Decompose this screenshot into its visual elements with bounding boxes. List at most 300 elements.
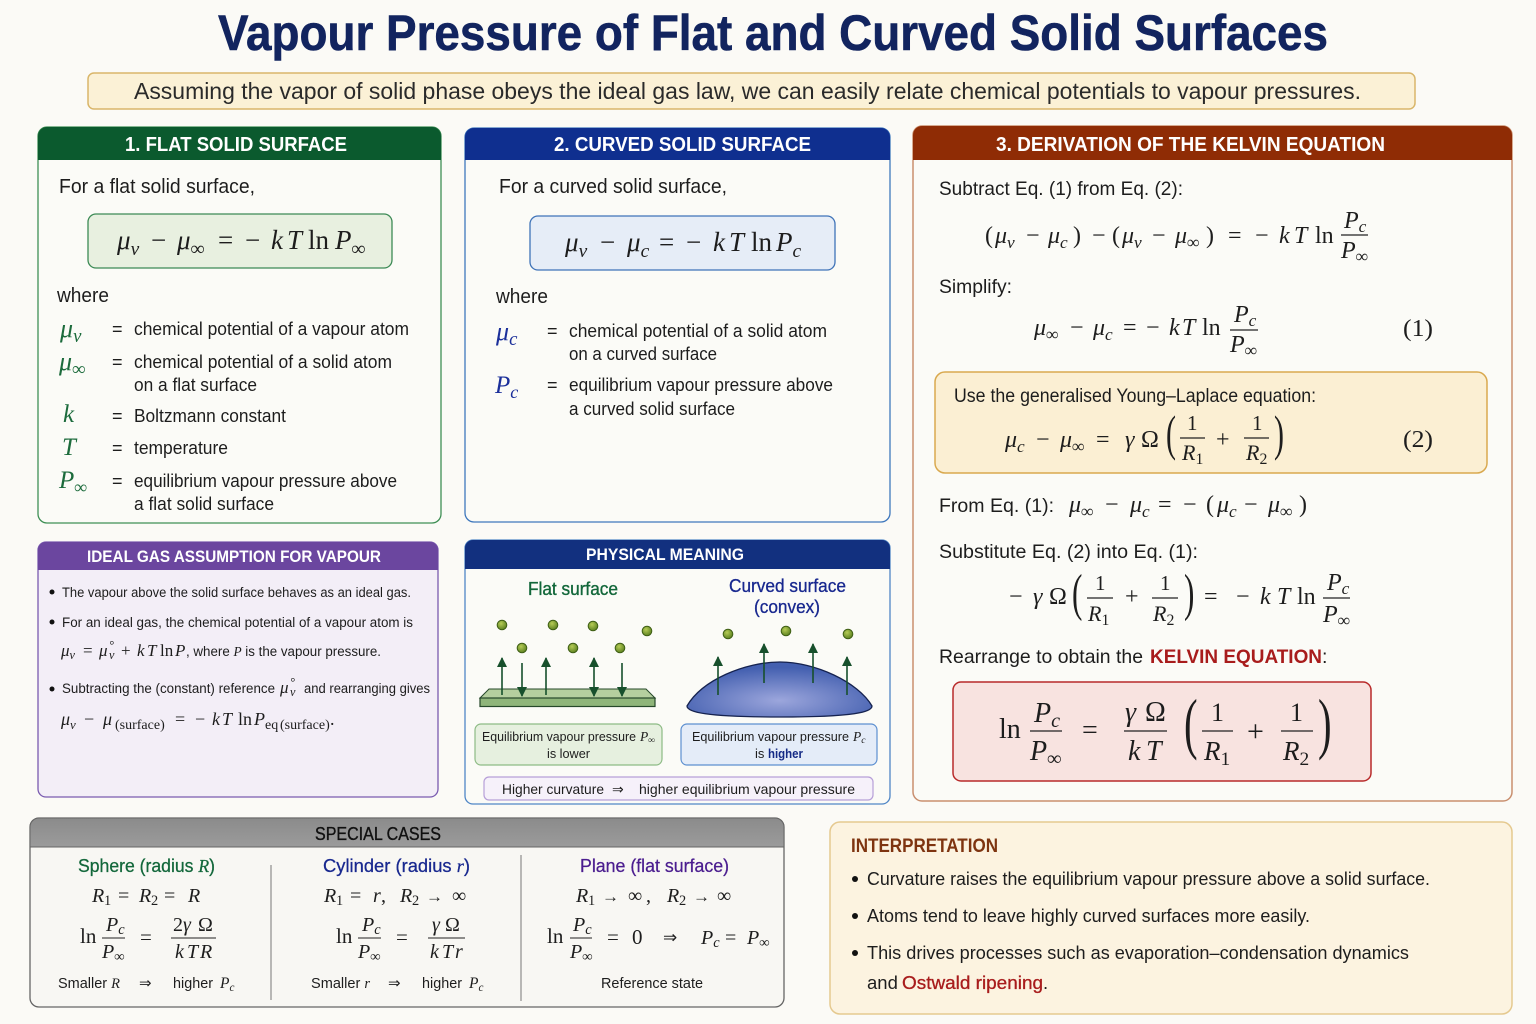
- case: sphere: P: [102, 941, 114, 963]
- definition: mu c: on a curved surface: [569, 344, 717, 364]
- case: sphere: k: [175, 941, 185, 963]
- step: rearrange to Kelvin equation: Rearrange to obtain the: [939, 646, 1143, 668]
- panel header: derivation: [913, 126, 1512, 160]
- equation: subtraction: −: [1026, 223, 1040, 249]
- step: from equation 1: c: [1142, 502, 1150, 521]
- result box: Kelvin equation: γ: [1125, 697, 1136, 728]
- equation: subtraction: −: [1092, 223, 1106, 249]
- callout: Young–Laplace equation: Use the generalised Young–Laplace equation:: [954, 386, 1316, 407]
- case: sphere: 2: [151, 893, 158, 909]
- case: plane: ln: [547, 924, 564, 948]
- case: plane: =: [607, 925, 619, 949]
- bullet: subtracting reference: °: [290, 675, 295, 689]
- note box: curvature conclusion: ⇒: [612, 781, 624, 797]
- subtitle banner: [88, 73, 1415, 109]
- equation: substitution: [1009, 565, 1350, 630]
- diagram: flat surface with atoms: [480, 620, 655, 706]
- equation: substitution: c: [1342, 579, 1350, 598]
- case: cylinder: T: [442, 941, 455, 963]
- case: plane: [547, 856, 769, 992]
- case: plane: 2: [679, 893, 686, 909]
- callout: Young–Laplace equation: (: [1166, 405, 1176, 462]
- step: from equation 1: −: [1244, 492, 1258, 518]
- case: cylinder: [311, 856, 483, 994]
- definition: mu infinity: [58, 347, 392, 395]
- callout: Young–Laplace equation: γ: [1125, 427, 1135, 453]
- definition: mu infinity: chemical potential of a solid atom: [134, 352, 392, 372]
- equation box: flat: T: [287, 225, 304, 255]
- case: cylinder: Smaller r: [311, 975, 370, 992]
- note box: curved higher pressure: c: [861, 735, 866, 746]
- label: curved surface: [729, 576, 846, 617]
- panel header: flat: [38, 127, 441, 160]
- definition: T: =: [112, 438, 123, 458]
- equation: subtraction: P: [1341, 238, 1356, 264]
- equation: subtraction: [985, 208, 1368, 266]
- case: sphere: c: [229, 982, 234, 994]
- definition: mu v: v: [73, 326, 82, 347]
- case: sphere: P: [220, 975, 229, 992]
- case: cylinder: →: [426, 887, 443, 906]
- equation 1: μ: [1033, 315, 1046, 341]
- equation: substitution: −: [1236, 584, 1250, 610]
- equation box: flat: P: [334, 225, 352, 255]
- label: curved surface: Curved surface: [729, 576, 846, 596]
- case: sphere: γ: [183, 914, 192, 936]
- callout: Young–Laplace equation: Ω: [1141, 427, 1159, 453]
- equation: subtraction: =: [1228, 223, 1242, 249]
- bullet: subtracting reference: k: [212, 709, 221, 729]
- definition: mu infinity: μ: [59, 347, 72, 376]
- equation: substitution: −: [1009, 584, 1023, 610]
- bullet: chemical potential: [50, 615, 413, 662]
- equation: substitution: ∞: [1338, 611, 1350, 630]
- case: cylinder: ∞: [370, 949, 380, 965]
- definition: P c: a curved solid surface: [569, 399, 735, 419]
- equation: substitution: γ: [1033, 584, 1043, 610]
- result box: Kelvin equation: +: [1247, 715, 1264, 748]
- case: sphere: R: [138, 885, 151, 907]
- result box: Kelvin equation: k: [1128, 736, 1140, 767]
- equation: substitution: (: [1072, 565, 1082, 622]
- step: from equation 1: μ: [1129, 492, 1142, 518]
- bullet: subtracting reference: T: [222, 709, 234, 729]
- equation: substitution: P: [1323, 602, 1338, 628]
- panel header: ideal gas: IDEAL GAS ASSUMPTION FOR VAPOUR: [87, 547, 381, 566]
- case: sphere: Smaller R: [58, 975, 120, 992]
- equation: substitution: =: [1204, 584, 1218, 610]
- equation box: flat: μ: [116, 225, 131, 255]
- case: plane: P: [570, 941, 582, 963]
- panel: interpretation: [830, 822, 1512, 1014]
- step text: simplify: Simplify:: [939, 276, 1012, 298]
- bullet: chemical potential: P: [174, 641, 185, 660]
- callout: Young–Laplace equation: 1: [1252, 411, 1262, 435]
- step: from equation 1: ∞: [1081, 502, 1093, 521]
- case: plane: ∞: [759, 935, 769, 951]
- panel header: derivation: 3. DERIVATION OF THE KELVIN EQUATION: [996, 134, 1385, 156]
- case: plane: P: [700, 927, 713, 949]
- case: plane: 0: [632, 925, 642, 949]
- definition: mu c: chemical potential of a solid atom: [569, 321, 827, 341]
- equation box: flat: [88, 214, 392, 268]
- result box: Kelvin equation: c: [1051, 710, 1060, 732]
- case: sphere: 1: [104, 893, 111, 909]
- equation box: curved: ln: [751, 227, 773, 257]
- bullet: subtracting reference: [50, 675, 430, 733]
- bullet: chemical potential: =: [83, 641, 93, 660]
- heading: interpretation: INTERPRETATION: [851, 836, 998, 857]
- step: from equation 1: −: [1105, 492, 1119, 518]
- equation box: flat: μ: [176, 225, 191, 255]
- equation 1: μ: [1092, 315, 1105, 341]
- case: sphere: higher: [173, 975, 213, 992]
- title: Vapour Pressure of Flat and Curved Solid Surfaces: [218, 5, 1328, 61]
- panel: physical meaning: [465, 540, 890, 804]
- equation: subtraction: ): [1206, 223, 1214, 249]
- note box: curvature conclusion: [484, 777, 873, 800]
- step: from equation 1: c: [1229, 502, 1237, 521]
- case: sphere: =: [164, 885, 175, 907]
- case: sphere: 2: [173, 914, 183, 936]
- case: plane: ∞: [628, 885, 642, 907]
- equation: substitution: R: [1088, 601, 1101, 626]
- step: from equation 1: [939, 492, 1307, 521]
- diagram: curved surface with atoms: [687, 626, 872, 717]
- equation: subtraction: P: [1344, 208, 1359, 234]
- equation box: flat: −: [151, 225, 166, 255]
- equation box: curved: −: [686, 227, 701, 257]
- case: sphere: c: [118, 922, 125, 938]
- case: plane: →: [693, 887, 710, 906]
- equation 1: c: [1105, 325, 1113, 344]
- bullet: chemical potential: T: [147, 641, 158, 660]
- bullet: subtracting reference: μ: [102, 709, 112, 729]
- result box: Kelvin equation: 1: [1290, 698, 1303, 727]
- callout: Young–Laplace equation: −: [1036, 427, 1050, 453]
- definition: P c: equilibrium vapour pressure above: [569, 375, 833, 395]
- bullet: chemical potential: °: [109, 638, 114, 652]
- step: from equation 1: μ: [1068, 492, 1081, 518]
- note box: curved higher pressure: is: [755, 746, 765, 761]
- equation: subtraction: ∞: [1356, 247, 1368, 266]
- definition: P infinity: equilibrium vapour pressure above: [134, 471, 397, 491]
- bullet: processes: and: [867, 972, 898, 993]
- equation: substitution: T: [1277, 584, 1292, 610]
- callout: Young–Laplace equation: c: [1017, 437, 1025, 456]
- definition: P infinity: ∞: [74, 477, 87, 497]
- panel header: physical meaning: [465, 540, 890, 569]
- equation: substitution: +: [1125, 584, 1139, 610]
- definition: mu v: μ: [60, 314, 73, 343]
- equation 1: ln: [1202, 315, 1221, 341]
- result box: Kelvin equation: P: [1030, 736, 1047, 767]
- case: cylinder: higher: [422, 975, 462, 992]
- case: plane: P: [573, 914, 585, 936]
- equation box: flat: ∞: [191, 239, 204, 260]
- panel header: ideal gas: [38, 542, 438, 570]
- bullet: chemical potential: μ: [60, 641, 70, 660]
- step: rearrange to Kelvin equation: [939, 646, 1327, 668]
- note box: curvature conclusion: Higher curvature: [502, 781, 604, 797]
- panel header: curved: 2. CURVED SOLID SURFACE: [554, 134, 811, 156]
- equation 1: =: [1123, 315, 1137, 341]
- equation: substitution: k: [1260, 584, 1271, 610]
- equation: substitution: 2: [1166, 612, 1174, 629]
- equation 1: [1033, 302, 1433, 360]
- bullet: subtracting reference: v: [290, 685, 296, 699]
- bullet: processes: [852, 942, 1409, 993]
- panel: derivation of the Kelvin equation: [913, 126, 1512, 801]
- case: sphere: ∞: [114, 949, 124, 965]
- definition: P c: [494, 372, 833, 419]
- case: sphere: T: [187, 941, 200, 963]
- case: plane: c: [713, 935, 720, 951]
- case: plane: ,: [646, 885, 651, 907]
- case: cylinder: k: [430, 941, 440, 963]
- definition: P c: P: [495, 372, 510, 399]
- bullet: subtracting reference: −: [84, 709, 94, 729]
- equation box: curved: c: [641, 241, 650, 262]
- label: flat surface: Flat surface: [528, 579, 618, 599]
- where label: flat: where: [56, 285, 109, 307]
- case: cylinder: P: [358, 941, 370, 963]
- equation 1: P: [1234, 302, 1249, 328]
- equation box: flat: v: [131, 239, 140, 260]
- case: cylinder: c: [374, 922, 381, 938]
- definition: mu v: chemical potential of a vapour atom: [134, 319, 409, 339]
- equation box: curved: T: [729, 227, 746, 257]
- case: sphere: Sphere (radius R): [78, 856, 215, 876]
- definition: P infinity: [58, 467, 397, 514]
- definition: mu infinity: =: [112, 352, 123, 372]
- panel header: special cases: SPECIAL CASES: [315, 824, 441, 844]
- note box: curved higher pressure: higher: [768, 746, 803, 761]
- note box: curvature conclusion: higher equilibrium vapour pressure: [639, 781, 855, 797]
- case: plane: P: [746, 927, 759, 949]
- intro text: flat: For a flat solid surface,: [59, 176, 255, 198]
- panel header: special cases: [30, 818, 784, 847]
- panel: curved solid surface: [465, 128, 890, 522]
- bullet: subtracting reference: eq: [265, 718, 278, 733]
- definition: k: =: [112, 406, 123, 426]
- equation box: curved: [530, 216, 835, 270]
- equation: subtraction: ln: [1315, 223, 1334, 249]
- bullet: chemical potential: v: [109, 648, 115, 662]
- bullet: chemical potential: v: [70, 648, 76, 662]
- bullet: subtracting reference: μ: [279, 678, 289, 697]
- result box: Kelvin equation: 2: [1300, 749, 1309, 770]
- equation 1: T: [1182, 315, 1197, 341]
- callout: Young–Laplace equation: 1: [1187, 411, 1198, 435]
- case: plane: R: [575, 885, 588, 907]
- bullet: subtracting reference: =: [175, 709, 185, 729]
- equation: subtraction: ): [1073, 223, 1081, 249]
- case: cylinder: γ: [432, 914, 441, 936]
- note box: flat lower pressure: [475, 724, 662, 765]
- equation box: curved: μ: [564, 227, 579, 257]
- definition: mu infinity: on a flat surface: [134, 375, 257, 395]
- case: plane: Reference state: [601, 975, 703, 992]
- definition: mu c: μ: [496, 317, 509, 346]
- case: cylinder: c: [478, 982, 483, 994]
- note box: curved higher pressure: Equilibrium vapour pressure: [692, 729, 849, 744]
- result box: Kelvin equation: Ω: [1145, 697, 1166, 728]
- step: from equation 1: ): [1299, 492, 1307, 518]
- equation: subtraction: −: [1152, 223, 1166, 249]
- step text: subtract: Subtract Eq. (1) from Eq. (2):: [939, 178, 1183, 200]
- bullet: curvature raises pressure: Curvature raises the equilibrium vapour pressure above a solid surface.: [867, 868, 1430, 889]
- result box: Kelvin equation: ∞: [1047, 748, 1061, 770]
- bullet: subtracting reference: ln: [238, 709, 252, 729]
- result box: Kelvin equation: =: [1082, 715, 1098, 746]
- bullet: chemical potential: For an ideal gas, the chemical potential of a vapour atom is: [62, 615, 413, 630]
- definition: mu c: =: [547, 321, 558, 341]
- equation: substitution: 1: [1095, 571, 1106, 595]
- equation: subtraction: ∞: [1187, 233, 1199, 252]
- case: plane: c: [585, 922, 592, 938]
- definition: mu infinity: ∞: [72, 359, 85, 380]
- callout: Young–Laplace equation: μ: [1004, 427, 1017, 453]
- callout: Young–Laplace equation: =: [1096, 427, 1110, 453]
- case: sphere: Ω: [198, 914, 213, 936]
- result box: Kelvin equation: R: [1204, 736, 1220, 766]
- callout: Young–Laplace equation: ): [1274, 405, 1284, 462]
- equation: subtraction: μ: [1121, 223, 1134, 249]
- case: cylinder: ln: [336, 924, 353, 948]
- bullet: chemical potential: k: [137, 641, 145, 660]
- case: sphere: ⇒: [139, 975, 152, 992]
- result box: Kelvin equation: (: [1184, 687, 1198, 762]
- definitions list: curved: [494, 317, 833, 419]
- case: plane: ∞: [717, 885, 731, 907]
- intro text: curved: For a curved solid surface,: [499, 176, 727, 198]
- case: sphere: R: [187, 885, 200, 907]
- bullet: subtracting reference: −: [195, 709, 205, 729]
- bullet: processes: .: [1043, 972, 1048, 993]
- equation: subtraction: μ: [1174, 223, 1187, 249]
- case: cylinder: r: [373, 885, 381, 907]
- case: cylinder: ⇒: [388, 975, 401, 992]
- equation 1: ∞: [1046, 325, 1058, 344]
- bullet: processes: This drives processes such as evaporation–condensation dynamics: [867, 942, 1409, 963]
- case: sphere: [58, 856, 234, 994]
- note box: curved higher pressure: P: [853, 729, 861, 744]
- panel: ideal gas assumption: [38, 542, 438, 797]
- definitions list: flat: [58, 314, 409, 514]
- callout: Young–Laplace equation: [935, 372, 1487, 473]
- case: plane: ⇒: [663, 928, 677, 947]
- equation 1: c: [1249, 311, 1257, 330]
- definition: P infinity: P: [59, 467, 74, 494]
- callout: Young–Laplace equation: R: [1246, 440, 1259, 465]
- callout: Young–Laplace equation: μ: [1059, 427, 1072, 453]
- case: cylinder: Cylinder (radius r): [323, 856, 470, 876]
- callout: Young–Laplace equation: +: [1216, 427, 1230, 453]
- note box: flat lower pressure: is lower: [547, 746, 591, 761]
- panel header: flat: 1. FLAT SOLID SURFACE: [125, 134, 347, 156]
- equation 1: ∞: [1245, 341, 1257, 360]
- equation: substitution: P: [1327, 570, 1342, 596]
- bullet: subtracting reference: v: [70, 717, 76, 732]
- definition: mu v: [59, 314, 409, 347]
- panel header: curved: [465, 128, 890, 160]
- equation: substitution: Ω: [1049, 584, 1067, 610]
- bullet: subtracting reference: P: [253, 709, 265, 729]
- case: plane: →: [602, 887, 619, 906]
- definition: P c: c: [510, 382, 518, 402]
- equation 1: −: [1070, 315, 1084, 341]
- case: cylinder: ∞: [452, 885, 466, 907]
- bullet: chemical potential: μ: [98, 641, 108, 660]
- step text: substitute: Substitute Eq. (2) into Eq. (1):: [939, 541, 1198, 563]
- step: from equation 1: μ: [1216, 492, 1229, 518]
- bullet: subtracting reference: μ: [60, 709, 70, 729]
- case: plane: 1: [588, 893, 595, 909]
- case: cylinder: R: [399, 885, 412, 907]
- callout: Young–Laplace equation: 1: [1195, 451, 1203, 468]
- equation 1: P: [1230, 332, 1245, 358]
- equation box: flat: ∞: [352, 239, 365, 260]
- panel: flat solid surface: [38, 127, 441, 523]
- definition: T: [62, 434, 228, 461]
- case: cylinder: 1: [336, 893, 343, 909]
- case: cylinder: P: [362, 914, 374, 936]
- bullet: processes: Ostwald ripening: [902, 972, 1043, 993]
- label: curved surface: (convex): [754, 597, 820, 617]
- case: plane: Plane (flat surface): [580, 856, 729, 876]
- note box: flat lower pressure: P: [640, 729, 648, 744]
- equation: subtraction: k: [1279, 223, 1290, 249]
- callout: Young–Laplace equation: (2): [1403, 427, 1433, 453]
- note box: curved higher pressure: [681, 724, 877, 765]
- result box: Kelvin equation: ln: [999, 714, 1021, 745]
- bullet: subtracting reference: (surface): [280, 718, 330, 733]
- step: from equation 1: (: [1206, 492, 1214, 518]
- definition: mu v: =: [112, 319, 123, 339]
- case: cylinder: 2: [412, 893, 419, 909]
- case: plane: ∞: [582, 949, 592, 965]
- bullet: subtracting reference: (surface): [115, 718, 165, 733]
- case: sphere: =: [140, 925, 152, 949]
- equation: subtraction: (: [985, 223, 993, 249]
- case: cylinder: r: [455, 941, 463, 963]
- where label: curved: where: [495, 286, 548, 308]
- definition: k: k: [63, 401, 75, 428]
- equation 1: −: [1146, 315, 1160, 341]
- equation box: curved: c: [792, 241, 802, 262]
- callout: Young–Laplace equation: ∞: [1072, 437, 1084, 456]
- bullet: subtracting reference: .: [330, 709, 334, 729]
- step: rearrange to Kelvin equation: :: [1322, 646, 1327, 668]
- equation: subtraction: v: [1134, 233, 1142, 252]
- case: sphere: ln: [80, 924, 97, 948]
- result box: Kelvin equation: P: [1034, 698, 1051, 729]
- result box: Kelvin equation: [953, 682, 1371, 781]
- equation box: flat: ln: [308, 225, 330, 255]
- case: sphere: R: [91, 885, 104, 907]
- equation box: curved: −: [600, 227, 615, 257]
- step: from equation 1: =: [1158, 492, 1172, 518]
- result box: Kelvin equation: T: [1146, 736, 1164, 767]
- step: from equation 1: ∞: [1280, 502, 1292, 521]
- callout: Young–Laplace equation: 2: [1259, 451, 1267, 468]
- equation 1: (1): [1403, 316, 1433, 342]
- case: cylinder: =: [396, 925, 408, 949]
- definition: T: T: [62, 434, 78, 461]
- equation 1: k: [1169, 315, 1180, 341]
- case: plane: =: [725, 927, 736, 949]
